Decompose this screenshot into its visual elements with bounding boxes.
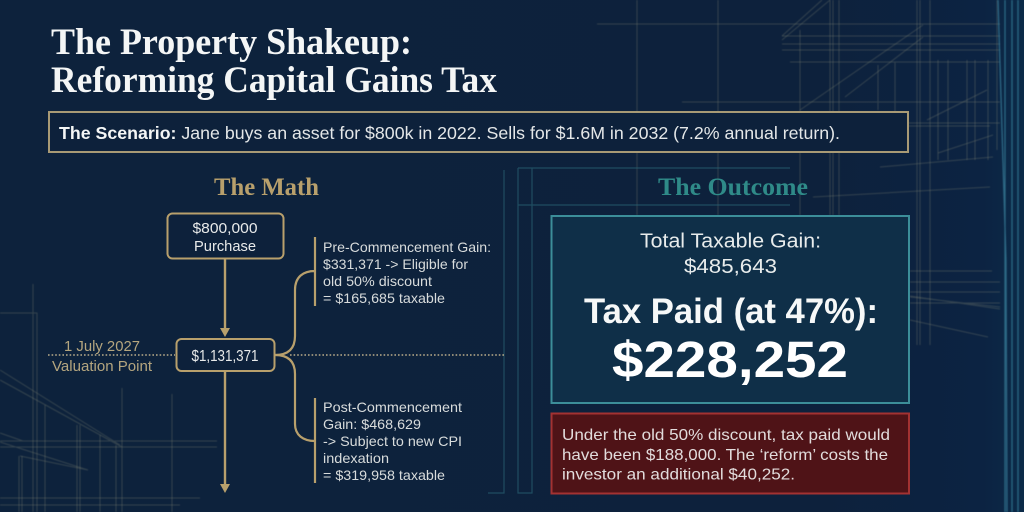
text: post-commencement gain: Gain: $468,629 (323, 416, 421, 432)
text: pre-commencement gain: $331,371 -> Eligible for (323, 256, 468, 272)
callout: old discount comparison: investor an additional $40,252. (562, 466, 795, 484)
panel: tax result (552, 216, 909, 403)
wireframe building, upper right (597, 0, 1000, 345)
outcome frame lines (488, 168, 790, 493)
text: post-commencement gain: Post-Commencement (323, 399, 462, 415)
panel: tax result: $485,643 (684, 255, 777, 278)
heading: the outcome: The Outcome (658, 172, 808, 201)
callout: old discount comparison (552, 414, 909, 494)
bracket (275, 237, 315, 483)
scenario box (49, 112, 908, 152)
valuation label (52, 338, 153, 375)
box: purchase (168, 214, 284, 258)
wireframe building, lower left (0, 284, 217, 512)
box: valuation amount (176, 339, 274, 371)
right edge blue lines (998, 0, 1018, 512)
panel: tax result: Tax Paid (at 47%): (584, 292, 878, 331)
box: valuation amount: $1,131,371 (192, 348, 259, 365)
box: purchase: Purchase (194, 238, 256, 255)
text: post-commencement gain: -> Subject to new CPI (323, 433, 462, 449)
text: pre-commencement gain (323, 239, 491, 306)
valuation dotted line (48, 354, 504, 356)
heading: the math: The Math (214, 172, 319, 201)
valuation label: 1 July 2027 (64, 338, 140, 355)
valuation label: Valuation Point (52, 358, 153, 375)
scenario box: The Scenario: Jane buys an asset for $800k in 2022. Sells for $1.6M in 2032 (7.2% annual return). (59, 123, 840, 143)
title: The Property Shakeup: (51, 22, 412, 63)
title: Reforming Capital Gains Tax (51, 60, 497, 101)
text: pre-commencement gain: Pre-Commencement Gain: (323, 239, 491, 255)
text: post-commencement gain: indexation (323, 450, 389, 466)
title (51, 22, 497, 101)
text: pre-commencement gain: = $165,685 taxable (323, 290, 445, 306)
panel: tax result: Total Taxable Gain: (640, 230, 821, 252)
callout: old discount comparison: have been $188,000. The ‘reform’ costs the (562, 447, 888, 464)
text: pre-commencement gain: old 50% discount (323, 273, 432, 289)
text: post-commencement gain: = $319,958 taxable (323, 467, 445, 483)
arrow: purchase to valuation (220, 258, 230, 337)
panel: tax result: $228,252 (612, 331, 848, 388)
callout: old discount comparison: Under the old 50% discount, tax paid would (562, 427, 890, 444)
text: post-commencement gain (323, 399, 462, 483)
box: purchase: $800,000 (192, 220, 258, 237)
arrow: valuation to sale (220, 371, 230, 493)
